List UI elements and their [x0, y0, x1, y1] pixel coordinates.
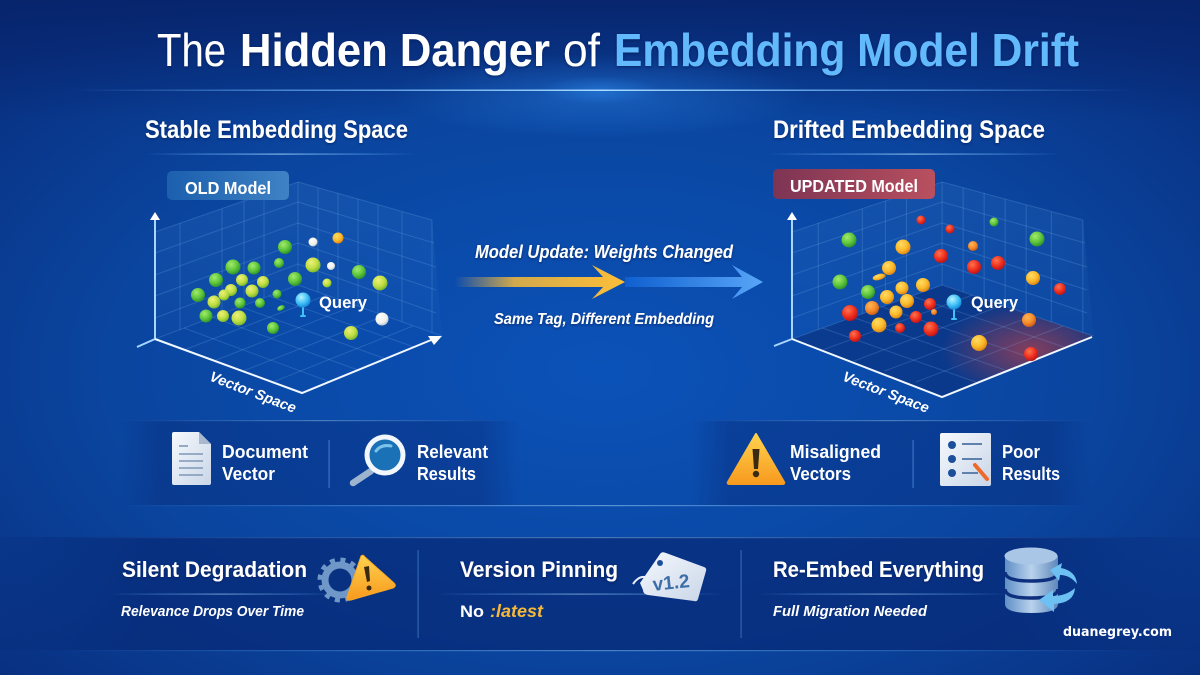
badge: old model — [167, 171, 289, 200]
query pin: Query — [319, 294, 368, 312]
badge: old model: OLD Model — [185, 178, 271, 198]
label: document vector: Vector — [222, 463, 275, 484]
subtext: Relevance Drops Over Time — [121, 603, 304, 620]
legend: stable side — [172, 432, 488, 488]
title — [157, 24, 1079, 76]
label: poor results: Results — [1002, 464, 1060, 484]
label: relevant results: Results — [417, 464, 476, 484]
heading: Version Pinning — [460, 557, 618, 582]
panel: drifted embedding space — [773, 120, 1094, 412]
axis label: Vector Space — [840, 369, 931, 417]
label: document vector — [222, 441, 308, 484]
heading: drifted: Drifted Embedding Space — [773, 116, 1045, 144]
data points: clustered green vectors — [191, 232, 388, 340]
subtext: no latest — [460, 601, 544, 621]
icon: database with refresh arrows — [1004, 548, 1077, 613]
icon: version tag — [633, 552, 706, 601]
label: misaligned vectors: Vectors — [790, 463, 851, 484]
legend: drifted side — [728, 433, 1060, 488]
axis label: Vector Space — [207, 369, 298, 417]
title: The — [157, 24, 226, 76]
icon: warning triangle — [728, 434, 784, 484]
icon: version tag: v1.2 — [652, 571, 691, 596]
subtext: Full Migration Needed — [773, 603, 928, 620]
query pin: Query — [971, 294, 1019, 312]
heading: Silent Degradation — [122, 557, 307, 582]
caption: same tag: Same Tag, Different Embedding — [494, 311, 714, 328]
icon: gear with warning — [320, 555, 395, 600]
arrow: gold — [455, 265, 625, 299]
data points: scattered misaligned vectors — [832, 216, 1066, 361]
panel: silent degradation — [110, 555, 395, 620]
label: poor results — [1002, 442, 1060, 484]
title: Embedding Model Drift — [614, 24, 1079, 76]
caption: model update: Model Update: Weights Changed — [475, 242, 734, 262]
arrow: blue — [625, 265, 763, 299]
label: relevant results — [417, 442, 488, 484]
axes — [774, 220, 1092, 397]
subtext: no latest: :latest — [490, 601, 544, 621]
3D chart: drifted — [773, 169, 1120, 417]
label: misaligned vectors — [790, 441, 881, 484]
watermark: duanegrey.com — [1063, 624, 1172, 640]
heading: Re-Embed Everything — [773, 557, 984, 582]
query pin — [946, 294, 1019, 320]
center: model update arrows — [455, 242, 763, 328]
title: of — [563, 24, 600, 76]
label: poor results: Poor — [1002, 442, 1040, 462]
panel: re-embed everything — [758, 548, 1077, 620]
heading: stable: Stable Embedding Space — [145, 116, 408, 144]
icon: document — [172, 432, 211, 485]
badge: updated model: UPDATED Model — [790, 176, 918, 196]
label: misaligned vectors: Misaligned — [790, 441, 881, 462]
3D chart: stable — [137, 171, 442, 417]
panel: version pinning — [435, 552, 725, 621]
subtext: no latest: No — [460, 602, 484, 621]
label: document vector: Document — [222, 441, 308, 462]
panel: stable embedding space — [137, 116, 442, 417]
axes — [137, 220, 436, 393]
title: Hidden Danger — [240, 24, 550, 76]
icon: results list — [940, 433, 991, 486]
label: relevant results: Relevant — [417, 442, 488, 462]
query pin — [296, 292, 368, 317]
icon: magnifier — [353, 437, 403, 483]
badge: updated model — [773, 169, 935, 199]
